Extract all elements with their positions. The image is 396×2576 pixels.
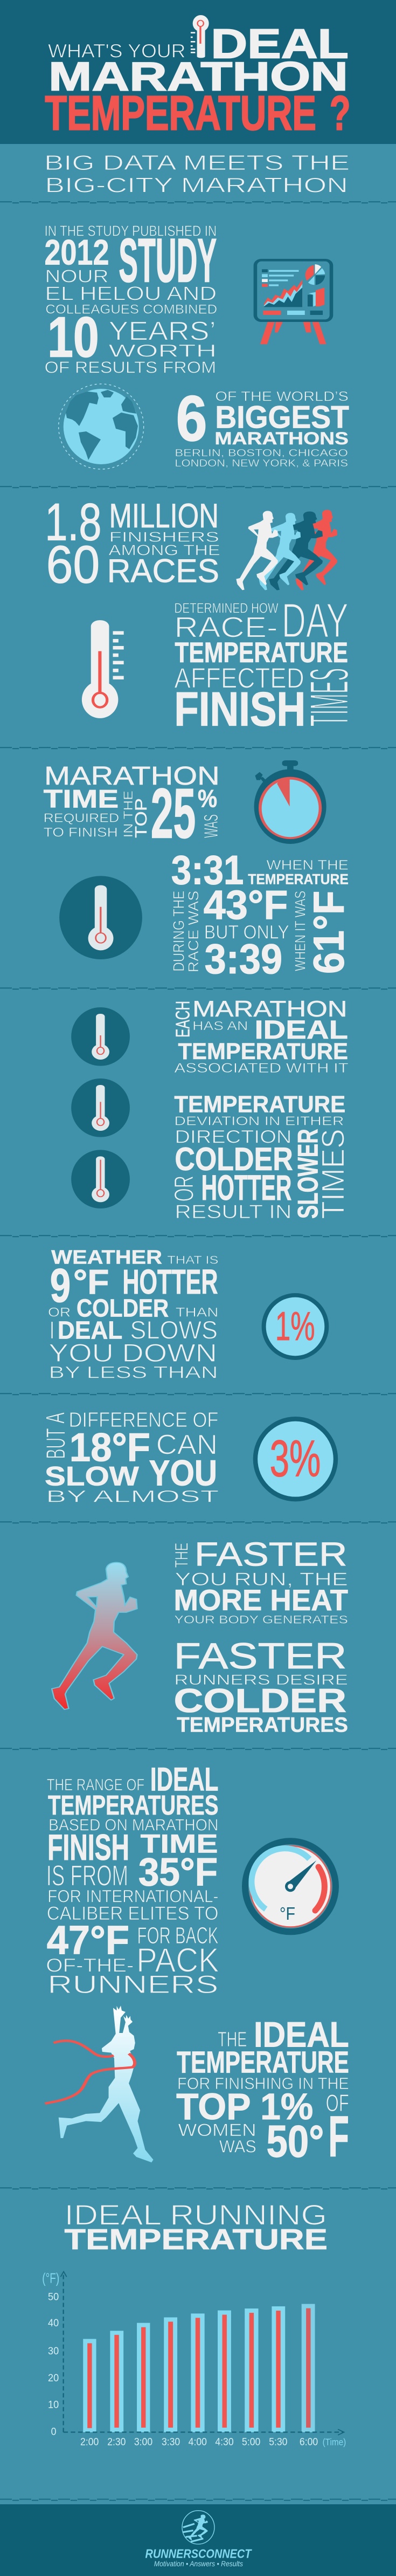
text block: marathon time: TO FINISH [44, 825, 118, 840]
text block: ideal for top women [176, 2015, 349, 2168]
text block: each marathon has an ideal temperature [172, 996, 349, 1076]
text block: ideal for top women: WAS [219, 2137, 256, 2156]
text block: times and temperatures: BUT ONLY [204, 922, 289, 943]
text block: eighteen degrees: CAN [156, 1428, 218, 1460]
text block: temperature deviation: DIRECTION [175, 1126, 291, 1147]
text: F [328, 2104, 349, 2168]
text block: six biggest: 6 [176, 383, 207, 454]
bar chart: 2:30 [107, 2436, 126, 2448]
text block: temperature range: PACK [136, 1941, 219, 1980]
text block: finishers: FINISHERS [109, 530, 219, 545]
text block: temperature range [46, 1761, 219, 1999]
text block: temperature range: FOR INTERNATIONAL- [47, 1887, 218, 1906]
text block: nine degrees: DEAL [58, 1316, 122, 1344]
text block: times and temperatures: DURING THE [170, 891, 187, 972]
text block: study intro [44, 223, 217, 376]
title [45, 20, 351, 140]
text block: race-day temperature: FINISH [174, 683, 305, 736]
heading: ideal running temperature: IDEAL RUNNING [65, 2199, 327, 2231]
icon: gauge [242, 1838, 339, 1935]
heading: big data meets the big-city marathon: BIG DATA MEETS THE [44, 151, 350, 174]
callout: 1 percent: 1% [275, 1304, 315, 1349]
icon: stopwatch [254, 760, 326, 844]
text block: marathon time: % [198, 785, 217, 813]
panel: range of ideal temperatures [46, 1761, 219, 1999]
bar chart: 50 [48, 2291, 59, 2303]
text block: race-day temperature [174, 594, 360, 736]
text block: study intro: IN THE STUDY PUBLISHED IN [44, 223, 217, 239]
text block: study intro: OF RESULTS FROM [44, 358, 216, 376]
text block: study intro: YEARS’ [109, 316, 216, 346]
text block: study intro: WORTH [109, 341, 217, 361]
callout: 1 percent [262, 1293, 329, 1360]
text block: times and temperatures: 3:39 [205, 936, 282, 983]
icon: thermometer high [71, 1150, 130, 1208]
text block: six biggest: MARATHONS [214, 429, 349, 448]
text block: each marathon has an ideal temperature: EACH [172, 1001, 194, 1038]
bar chart: 2:00 [80, 2436, 99, 2448]
icon: four runners [236, 510, 337, 590]
text block: marathon time: TOP [131, 798, 150, 838]
text block: nine degrees: YOU DOWN [48, 1339, 217, 1368]
text block: eighteen degrees [41, 1408, 219, 1506]
title: MARATHON [48, 54, 348, 99]
bar chart: 5:30 [269, 2436, 287, 2448]
text block: nine degrees: WEATHER [51, 1246, 162, 1268]
text block: marathon time: WAS [200, 814, 222, 838]
text block: eighteen degrees: BUT [41, 1428, 71, 1459]
heading: ideal running temperature [65, 2199, 328, 2256]
text block: the faster you run [171, 1536, 348, 1626]
text block: temperature range: 47°F [47, 1918, 129, 1963]
text block: nine degrees [48, 1246, 218, 1382]
text block: the faster you run: FASTER [194, 1536, 348, 1573]
icon: thermometer [82, 620, 124, 718]
icon: presentation board [255, 260, 331, 344]
callout: 3 percent: 3% [270, 1430, 321, 1487]
title: ? [330, 86, 351, 140]
logo: runnersconnect: RUNNERSCONNECT [145, 2547, 252, 2561]
text block: study intro: COLLEAGUES COMBINED [45, 302, 217, 317]
bar chart: 20 [48, 2373, 59, 2384]
text block: eighteen degrees: YOU [149, 1453, 217, 1493]
bar chart: 3:30 [162, 2436, 180, 2448]
heading: ideal running temperature: TEMPERATURE [65, 2223, 328, 2256]
text: FOR BACK [137, 1922, 218, 1949]
bar chart: 10 [48, 2399, 59, 2410]
text block: temperature range: TIME [141, 1830, 218, 1858]
logo: runnersconnect: Motivation • Answers • Results [154, 2560, 243, 2568]
text block: temperature deviation: SLOWER [291, 1129, 324, 1219]
text block: nine degrees: SLOWS [130, 1316, 218, 1344]
icon: runner heat gradient [52, 1562, 137, 1709]
text block: times and temperatures [170, 847, 353, 983]
title: DEAL [211, 20, 349, 67]
text block: temperature deviation [170, 1091, 351, 1222]
header band [0, 0, 396, 144]
text: IDEAL [150, 1761, 218, 1798]
text block: the faster you run: THE [171, 1543, 192, 1568]
text block: faster runners desire colder: RUNNERS DESIRE [174, 1672, 348, 1688]
text block: temperature deviation: DEVIATION IN EITHER [174, 1114, 344, 1128]
text block: temperature range: OF-THE- [46, 1955, 134, 1976]
panel: header [44, 15, 351, 197]
icon: woman crossing finish line [45, 2005, 154, 2162]
text block: six biggest: OF THE WORLD’S [215, 388, 349, 404]
text block: marathon time: 25 [151, 774, 196, 853]
icon: thermometer as letter I [191, 15, 209, 58]
text block: each marathon has an ideal temperature: HAS AN [192, 1019, 248, 1033]
text block: finishers: AMONG THE [109, 542, 220, 559]
panel: footer [0, 2504, 396, 2576]
panel: faster runners [52, 1536, 348, 1736]
panel: top 1 percent of women [45, 2005, 349, 2168]
text block: nine degrees: OR [48, 1305, 71, 1320]
bar chart: 30 [48, 2345, 59, 2357]
text block: race-day temperature: DETERMINED HOW [174, 601, 279, 616]
panel: slowdown percentages: HOTTER [122, 1262, 218, 1301]
text block: study intro: NOUR [45, 266, 109, 286]
bar chart: (Time) [323, 2436, 346, 2447]
text block: six biggest [176, 383, 349, 454]
text block: marathon time: REQUIRED [44, 811, 119, 825]
icon: thermometer in circle [59, 876, 142, 959]
text block: faster runners desire colder: FASTER [174, 1636, 347, 1677]
text block: race-day temperature: TIMES [298, 668, 360, 726]
text block: ideal for top women: 50° [267, 2116, 324, 2166]
icon: gauge: °F [280, 1904, 295, 1924]
text block: temperature deviation: COLDER [175, 1141, 293, 1177]
text block: eighteen degrees: DIFFERENCE OF [69, 1408, 218, 1431]
text block: study intro: EL HELOU AND [45, 283, 217, 305]
text block: temperature deviation: TIMES [315, 1129, 351, 1219]
text block: city list: LONDON, NEW YORK, & PARIS [175, 458, 348, 469]
text block: each marathon has an ideal temperature: IDEAL [255, 1015, 348, 1045]
text block: city list [175, 448, 348, 469]
panel: finishers and race-day [45, 448, 360, 736]
bar chart: 6:00 [300, 2436, 318, 2448]
text block: temperature range: CALIBER ELITES TO [47, 1903, 218, 1924]
text block: ideal for top women: THE [218, 2028, 247, 2051]
text block: times and temperatures: 43°F [204, 882, 288, 928]
text block: faster runners desire colder [174, 1636, 348, 1736]
text block: nine degrees: 9 [50, 1259, 71, 1312]
text block: race-day temperature: DAY [282, 594, 349, 648]
panel: top 25 percent [44, 760, 353, 983]
bar chart: 40 [48, 2318, 59, 2329]
text block: nine degrees: BY LESS THAN [48, 1363, 218, 1382]
text block: eighteen degrees: 18°F [70, 1425, 150, 1470]
text block: times and temperatures: RACE WAS [185, 891, 202, 972]
text block: finishers: MILLION [109, 497, 219, 534]
text block: nine degrees: I [50, 1316, 54, 1344]
icon: thermometer low [71, 1007, 130, 1066]
text block: marathon time [44, 761, 222, 853]
bar chart: 4:00 [189, 2436, 207, 2448]
panel: slowdown percentages [41, 1246, 338, 1506]
bar chart: 0 [51, 2426, 57, 2437]
bar chart: (°F) [42, 2270, 59, 2286]
text block: temperature deviation: RESULT IN [175, 1201, 291, 1222]
text block: temperature deviation: OR [170, 1176, 199, 1201]
icon: globe [59, 384, 144, 469]
text block: the faster you run: YOU RUN, THE [175, 1569, 348, 1589]
panel: ideal temperature and deviation [71, 996, 351, 1222]
text block: ideal for top women: TOP 1% [176, 2086, 313, 2127]
text block: city list: BERLIN, BOSTON, CHICAGO [175, 448, 348, 458]
text block: marathon time: MARATHON [44, 761, 220, 791]
bar chart: 5:00 [242, 2436, 260, 2448]
text block: each marathon has an ideal temperature: MARATHON [192, 996, 348, 1021]
text block: race-day temperature: AFFECTED [174, 662, 304, 694]
text block: eighteen degrees: SLOW [45, 1461, 139, 1491]
text block: race-day temperature: RACE- [174, 610, 278, 643]
text block: eighteen degrees: A [41, 1412, 71, 1424]
panel: study [44, 223, 349, 454]
text block: temperature range: FINISH [47, 1827, 129, 1868]
text block: finishers: RACES [107, 552, 219, 589]
text block: finishers: 1.8 [45, 493, 101, 552]
text block: times and temperatures: 61°F [304, 891, 353, 974]
heading: big data meets the big-city marathon: BIG-CITY MARATHON [45, 173, 348, 197]
text block: nine degrees: °F [73, 1262, 109, 1301]
text block: the faster you run: YOUR BODY GENERATES [174, 1613, 348, 1626]
text block: temperature range: BASED ON MARATHON [48, 1815, 218, 1834]
text block: finishers: 60 [46, 535, 100, 594]
text block: study intro: 2012 [44, 233, 109, 272]
text block: nine degrees: COLDER [77, 1294, 169, 1322]
bar chart: 3:00 [134, 2436, 152, 2448]
text block: study intro: 10 [47, 306, 99, 369]
heading: big data meets the big-city marathon [44, 151, 350, 197]
text block: temperature range: 35°F [138, 1850, 218, 1894]
text block: nine degrees: THAT IS [167, 1253, 218, 1266]
callout: 3 percent [253, 1417, 338, 1501]
text block: temperature range: THE RANGE OF [47, 1775, 144, 1794]
panel: ideal running temperature chart [42, 2199, 346, 2448]
text block: marathon time: TIME [44, 785, 119, 813]
text block: eighteen degrees: BY ALMOST [46, 1487, 219, 1506]
bar chart [42, 2270, 346, 2448]
icon: thermometer medium [71, 1079, 130, 1137]
text block: temperature range: TEMPERATURES [48, 1790, 218, 1821]
text block: temperature range: RUNNERS [47, 1970, 218, 1999]
text: OF [326, 2090, 349, 2117]
text block: temperature range: IS FROM [46, 1859, 128, 1892]
text block: nine degrees: THAN [176, 1305, 218, 1320]
logo: runnersconnect [145, 2511, 252, 2568]
text block: faster runners desire colder: COLDER [174, 1682, 346, 1720]
text block: each marathon has an ideal temperature: ASSOCIATED WITH IT [174, 1060, 349, 1076]
text block: times and temperatures: WHEN IT WAS [292, 891, 309, 971]
text block: ideal for top women: WOMEN [178, 2121, 256, 2140]
bar chart: 4:30 [215, 2436, 234, 2448]
text block: times and temperatures: WHEN THE [267, 858, 349, 873]
text block: times and temperatures: 3:31 [171, 847, 244, 893]
title: WHAT'S YOUR [48, 41, 186, 62]
text block: marathon time: IN THE [121, 791, 136, 837]
text block: finishers [45, 493, 220, 594]
